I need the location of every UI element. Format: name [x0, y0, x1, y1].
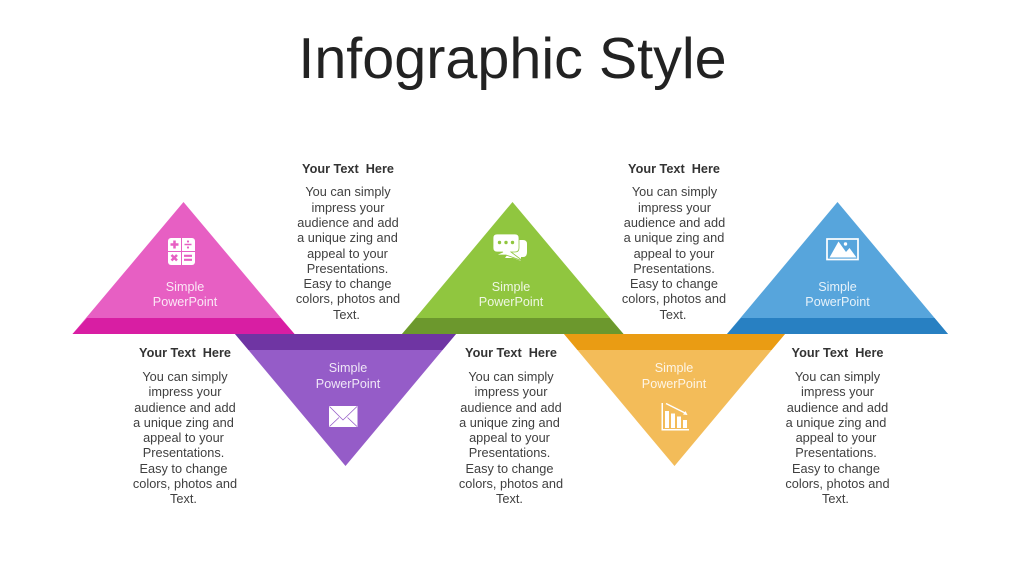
- text block 2: Your Text Here: [302, 162, 394, 176]
- text block 5: audience and add: [787, 400, 888, 415]
- icon: picture: [827, 239, 858, 260]
- text block 3: Text.: [496, 491, 523, 506]
- text block 5: a unique zing and: [786, 415, 886, 430]
- label: pink triangle: PowerPoint: [153, 295, 218, 309]
- text block 1: Text.: [170, 491, 197, 506]
- text block 3: Presentations.: [469, 445, 550, 460]
- text block 3: a unique zing and: [459, 415, 560, 430]
- text block 4: colors, photos and: [622, 291, 726, 306]
- panel: blue triangle: [727, 202, 948, 334]
- text block 5: appeal to your: [796, 430, 877, 445]
- text block 1: audience and add: [134, 400, 236, 415]
- text block 3: Easy to change: [466, 461, 553, 476]
- text block 1: appeal to your: [143, 430, 225, 445]
- text block 1: Presentations.: [143, 445, 224, 460]
- label: orange triangle: Simple: [655, 361, 693, 375]
- text block 3: You can simply: [468, 369, 554, 384]
- text block 4: audience and add: [624, 215, 725, 230]
- panel: pink triangle: [72, 202, 294, 334]
- text block 1: Easy to change: [140, 461, 227, 476]
- panel: purple triangle: [235, 334, 456, 466]
- text block 4: You can simply: [632, 184, 718, 199]
- text block 1: a unique zing and: [133, 415, 234, 430]
- icon: envelope: [329, 406, 358, 427]
- text block 5: Text.: [822, 491, 849, 506]
- text block 2: impress your: [312, 200, 385, 215]
- label: green triangle: PowerPoint: [479, 295, 544, 309]
- title: Infographic Style: [298, 27, 727, 91]
- text block 3: Your Text Here: [465, 346, 557, 360]
- text block 4: Text.: [660, 307, 686, 322]
- text block 1: colors, photos and: [133, 476, 237, 491]
- text block 2: Text.: [333, 307, 360, 322]
- text block 3: [459, 346, 563, 506]
- text block 4: Your Text Here: [628, 162, 720, 176]
- text block 5: You can simply: [795, 369, 881, 384]
- label: blue triangle: PowerPoint: [805, 295, 870, 309]
- label: green triangle: Simple: [492, 280, 530, 294]
- label: purple triangle: Simple: [329, 361, 367, 375]
- text block 3: audience and add: [460, 400, 562, 415]
- text block 4: Easy to change: [630, 276, 718, 291]
- label: blue triangle: Simple: [818, 280, 857, 294]
- text block 4: appeal to your: [634, 246, 715, 261]
- text block 2: colors, photos and: [296, 291, 400, 306]
- text block 5: Your Text Here: [792, 346, 883, 360]
- panel: orange triangle: [564, 334, 785, 466]
- text block 3: appeal to your: [469, 430, 551, 445]
- text block 2: [296, 162, 400, 322]
- text block 1: [133, 346, 237, 506]
- text block 4: Presentations.: [633, 261, 715, 276]
- text block 1: Your Text Here: [139, 346, 231, 360]
- text block 2: appeal to your: [307, 246, 389, 261]
- text block 3: colors, photos and: [459, 476, 563, 491]
- label: purple triangle: PowerPoint: [316, 377, 381, 391]
- text block 5: colors, photos and: [785, 476, 890, 491]
- text block 2: Easy to change: [304, 276, 391, 291]
- text block 5: impress your: [801, 384, 875, 399]
- text block 5: Easy to change: [792, 461, 880, 476]
- text block 4: impress your: [638, 200, 712, 215]
- text block 5: [785, 346, 890, 506]
- text block 2: audience and add: [297, 215, 399, 230]
- text block 1: You can simply: [142, 369, 228, 384]
- text block 2: Presentations.: [307, 261, 388, 276]
- panel: green triangle: [402, 202, 624, 334]
- text block 2: a unique zing and: [297, 230, 398, 245]
- text block 4: [622, 162, 726, 322]
- text block 4: a unique zing and: [624, 230, 724, 245]
- text block 1: impress your: [149, 384, 222, 399]
- text block 5: Presentations.: [795, 445, 877, 460]
- text block 2: You can simply: [305, 184, 391, 199]
- label: orange triangle: PowerPoint: [642, 377, 707, 391]
- icon: bar chart: [662, 403, 689, 430]
- text block 3: impress your: [475, 384, 548, 399]
- icon: speech bubbles: [493, 234, 527, 261]
- label: pink triangle: Simple: [166, 280, 204, 294]
- icon: calculator: [168, 238, 195, 265]
